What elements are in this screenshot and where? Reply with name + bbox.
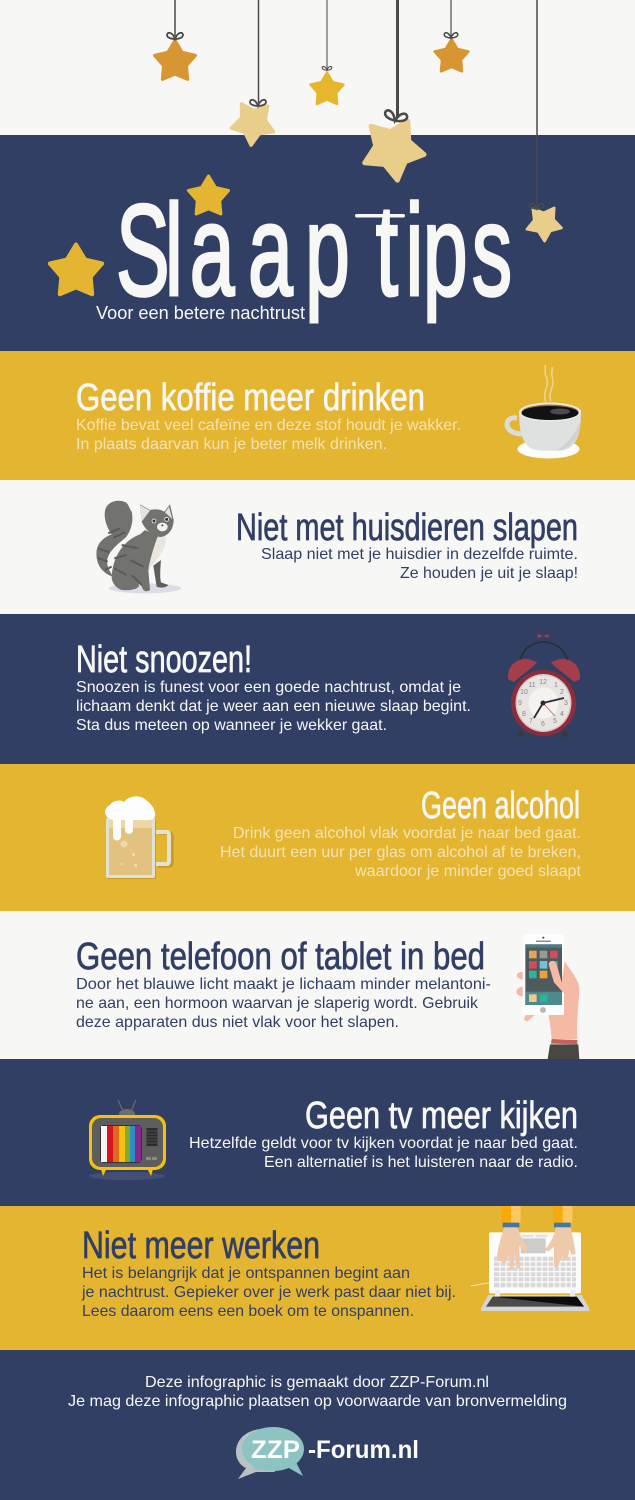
text: alcohol: Het duurt een uur per glas om alcohol af te breken, xyxy=(220,844,581,861)
panel: coffee xyxy=(0,351,635,480)
logo: ZZP-Forum.nl: -Forum.nl xyxy=(308,1436,419,1464)
text: alcohol: Drink geen alcohol vlak voordat je naar bed gaat. xyxy=(233,825,581,842)
icon: alarm clock: 8 xyxy=(522,711,526,718)
text: snooze xyxy=(76,679,471,734)
icon: orange star left xyxy=(155,33,195,79)
panel: alcohol xyxy=(0,764,635,911)
panel: pets xyxy=(0,480,635,614)
icon: alarm clock: 4 xyxy=(560,711,564,718)
hanging strings xyxy=(175,0,537,207)
text: tv xyxy=(189,1135,578,1171)
text: work: Het is belangrijk dat je ontspannen begint aan xyxy=(82,1265,410,1282)
icon: orange star right xyxy=(435,33,468,71)
panel: footer xyxy=(0,1350,635,1500)
text: snooze: lichaam denkt dat je weer aan een nieuwe slaap begint. xyxy=(76,698,471,715)
text: snooze: Sta dus meteen op wanneer je wekker gaat. xyxy=(76,717,387,734)
icon: alarm clock: 7 xyxy=(529,718,533,725)
icon: small yellow star xyxy=(311,66,343,104)
icon: alarm clock: 12 xyxy=(539,679,547,686)
text: credits: Deze infographic is gemaakt door ZZP-Forum.nl xyxy=(145,1374,489,1391)
text: alcohol: waardoor je minder goed slaapt xyxy=(354,863,582,880)
text: credits xyxy=(68,1374,567,1410)
text: phone: ne aan, een hormoon waarvan je slaperig wordt. Gebruik xyxy=(76,995,479,1012)
text: tv: Een alternatief is het luisteren naar de radio. xyxy=(264,1154,578,1171)
icon: alarm clock: 10 xyxy=(520,689,528,696)
icon: coffee cup xyxy=(507,365,581,458)
icon: pale star right xyxy=(519,198,567,245)
icon: alarm clock: 1 xyxy=(554,682,558,689)
logo: ZZP-Forum.nl xyxy=(236,1427,419,1479)
icon: yellow star left of title xyxy=(50,245,102,294)
text: coffee: Koffie bevat veel cafeïne en deze stof houdt je wakker. xyxy=(76,417,461,434)
icon: alarm clock: 6 xyxy=(541,721,545,728)
icon: alarm clock: 2 xyxy=(560,689,564,696)
icon: television xyxy=(89,1100,166,1180)
panel: work xyxy=(0,1206,635,1350)
icon: beer mug xyxy=(105,796,172,879)
text: coffee xyxy=(76,417,461,453)
icon: yellow star by title xyxy=(189,176,228,214)
text: work: Lees daarom eens een boek om te onspannen. xyxy=(82,1303,414,1320)
title: Slaaptips xyxy=(116,177,512,323)
icon: large pale star xyxy=(349,105,432,188)
icon: alarm clock: 3 xyxy=(564,700,568,707)
icon: cat xyxy=(96,501,181,593)
subtitle: Voor een betere nachtrust xyxy=(96,303,305,323)
panel: snooze xyxy=(0,614,635,764)
text: tv: Hetzelfde geldt voor tv kijken voordat je naar bed gaat. xyxy=(189,1135,578,1152)
panel: tv xyxy=(0,1059,635,1206)
heading: phone: Geen telefoon of tablet in bed xyxy=(76,936,485,978)
icon: pale star xyxy=(223,93,281,149)
text: pets: Ze houden je uit je slaap! xyxy=(400,565,578,582)
text: snooze: Snoozen is funest voor een goede nachtrust, omdat je xyxy=(76,679,461,696)
text: work: je nachtrust. Gepieker over je werk past daar niet bij. xyxy=(81,1284,456,1301)
icon: alarm clock xyxy=(508,634,580,738)
panel: phone xyxy=(0,911,635,1059)
logo: ZZP-Forum.nl: ZZP xyxy=(251,1436,300,1464)
heading: tv: Geen tv meer kijken xyxy=(305,1095,578,1137)
icon: alarm clock: 9 xyxy=(518,700,522,707)
text: work xyxy=(81,1265,456,1320)
heading: snooze: Niet snoozen! xyxy=(76,639,252,681)
icon: hand holding phone xyxy=(516,934,579,1059)
text: pets: Slaap niet met je huisdier in dezelfde ruimte. xyxy=(261,546,578,563)
text: phone: deze apparaten dus niet vlak voor het slapen. xyxy=(76,1014,399,1031)
text: alcohol xyxy=(220,825,582,880)
panel: header background xyxy=(0,0,635,351)
icon: alarm clock: 11 xyxy=(528,682,536,689)
icon: alarm clock: 5 xyxy=(553,718,557,725)
text: pets xyxy=(261,546,578,582)
text: phone: Door het blauwe licht maakt je lichaam minder melantoni- xyxy=(76,976,491,993)
icon: laptop with hands xyxy=(471,1206,589,1311)
heading: coffee: Geen koffie meer drinken xyxy=(76,377,425,419)
text: coffee: In plaats daarvan kun je beter melk drinken. xyxy=(76,436,387,453)
heading: work: Niet meer werken xyxy=(82,1225,320,1267)
text: credits: Je mag deze infographic plaatsen op voorwaarde van bronvermelding xyxy=(68,1393,567,1410)
text: phone xyxy=(76,976,491,1031)
